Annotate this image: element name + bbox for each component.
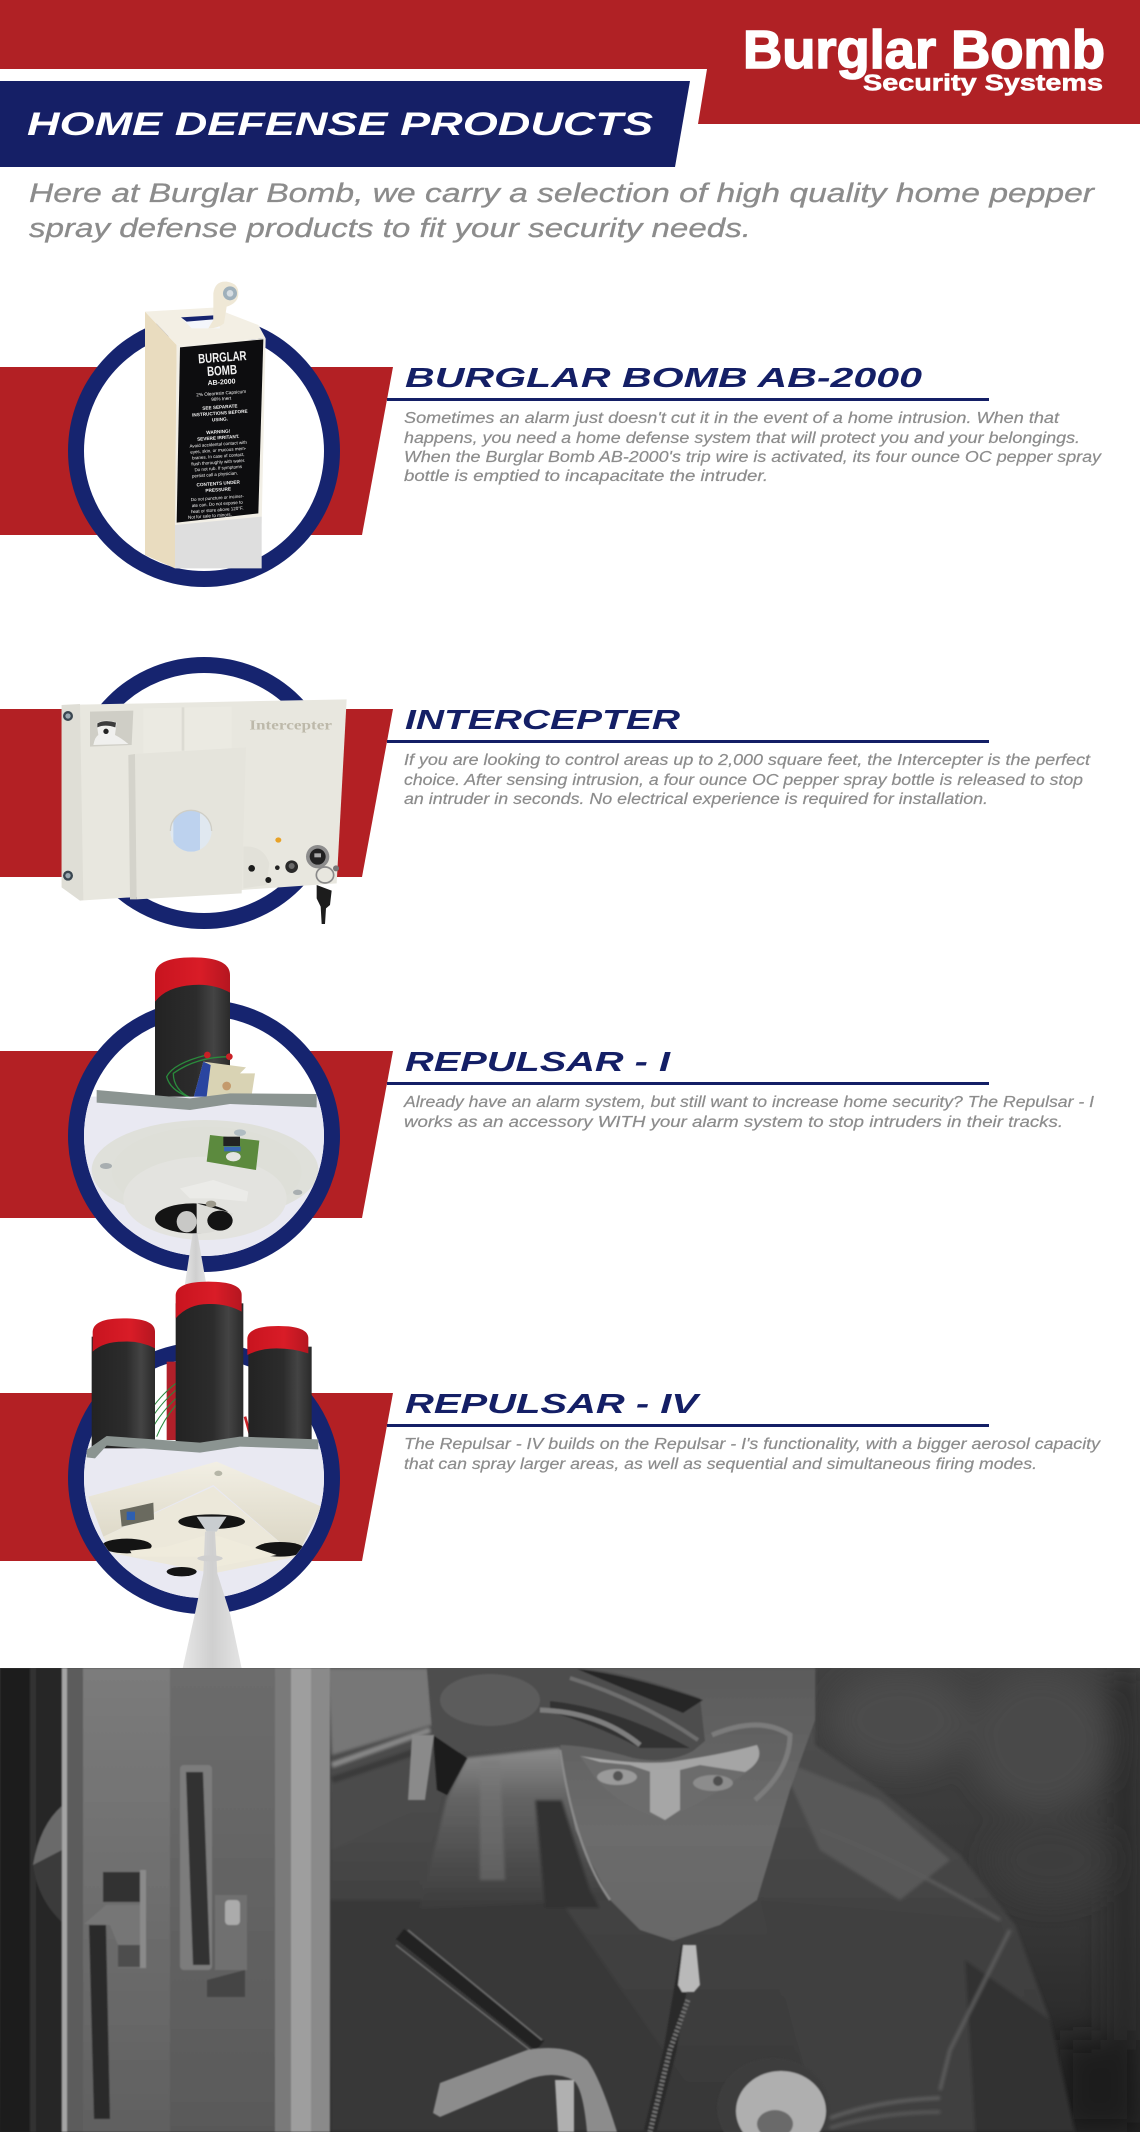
product image: Repulsar IV: [77, 1282, 333, 1668]
seams: [940, 1930, 1010, 2090]
product label text: BOMB: [207, 362, 238, 379]
description: Sometimes an alarm just doesn't cut it in the event of a home intrusion. When that: [404, 410, 1060, 427]
navy ring: [76, 1008, 332, 1264]
crowbar: [433, 2048, 617, 2132]
heading: REPULSAR - I: [405, 1046, 672, 1077]
panel: Repulsar - IV: [0, 1282, 1101, 1668]
description: that can spray larger areas, as well as sequential and simultaneous firing modes.: [404, 1456, 1037, 1473]
product label text: SEE SEPARATE: [202, 403, 238, 411]
heading rule: [387, 1082, 989, 1085]
collar folds: [436, 1746, 582, 1857]
product label text: WARNING!: [206, 428, 231, 435]
heading rule: [387, 398, 989, 401]
description: [404, 410, 1102, 485]
product image: Repulsar I: [77, 957, 333, 1290]
nose: [650, 1768, 680, 1820]
cylinders: [92, 1282, 312, 1448]
title bar: [0, 81, 690, 167]
key: [316, 867, 334, 924]
description: works as an accessory WITH your alarm system to stop intruders in their tracks.: [404, 1114, 1063, 1131]
header: [0, 0, 1140, 167]
product label text: BURGLAR: [198, 348, 247, 366]
product label text: AB-2000: [207, 378, 236, 387]
product label text: 98% Inert: [211, 396, 232, 402]
glove: [427, 1668, 705, 1760]
red band: [0, 709, 393, 877]
intro paragraph: Here at Burglar Bomb, we carry a selection of high quality home pepper: [29, 178, 1095, 208]
product image: AB-2000: [145, 282, 266, 568]
intro paragraph: [29, 178, 1095, 243]
product label text: SEVERE IRRITANT.: [197, 434, 240, 442]
description: an intruder in seconds. No electrical experience is required for installation.: [404, 791, 988, 808]
description: If you are looking to control areas up to 2,000 square feet, the Intercepter is the perfect: [404, 752, 1091, 769]
product label text: [188, 348, 248, 520]
product label text: INSTRUCTIONS BEFORE: [192, 409, 248, 418]
product image: Intercepter: [62, 699, 347, 924]
sleeve: [327, 1668, 432, 1755]
product label text: heat or store above 120°F.: [191, 506, 244, 514]
product label text: eyes, skin, or mucous mem-: [190, 446, 247, 455]
product label text: CONTENTS UNDER: [196, 479, 241, 488]
description: choice. After sensing intrusion, a four ounce OC pepper spray bottle is released to stop: [404, 772, 1083, 789]
eyes: [597, 1769, 637, 1785]
heading rule: [387, 1424, 989, 1427]
description: happens, you need a home defense system that will protect you and your belongings.: [404, 430, 1080, 447]
intro paragraph: spray defense products to fit your security needs.: [29, 213, 751, 243]
navy ring: [76, 323, 332, 579]
description: [404, 752, 1091, 808]
product label text: 2% Oleoresin Capsicum: [196, 389, 246, 397]
panel: Burglar Bomb AB-2000: [0, 282, 1102, 579]
jacket: [327, 1668, 1075, 2132]
logo: Security Systems: [863, 70, 1103, 96]
face opening: [583, 1758, 591, 1762]
heading: INTERCEPTER: [405, 704, 681, 735]
logo: Burglar Bomb: [743, 20, 1105, 80]
description: When the Burglar Bomb AB-2000's trip wire is activated, its four ounce OC pepper spray: [404, 449, 1102, 466]
description: The Repulsar - IV builds on the Repulsar - I's functionality, with a bigger aerosol capacity: [404, 1436, 1101, 1453]
cylinder: [155, 957, 230, 1098]
panel: Intercepter: [0, 665, 1091, 924]
lower zipper pull: [555, 2080, 574, 2132]
zipper pull on sleeve: [408, 1735, 434, 1800]
product label text: ate can. Do not expose to: [192, 500, 243, 508]
description: Already have an alarm system, but still want to increase home security? The Repulsar - I: [403, 1094, 1095, 1111]
red band: [0, 1393, 393, 1561]
red band: [0, 1051, 393, 1218]
foam ceiling strip: [87, 1436, 318, 1458]
navy ring: [76, 1350, 332, 1606]
spray cone: [183, 1532, 242, 1668]
product label text: Not for sale to minors.: [188, 512, 232, 520]
product label text: flush thoroughly with water.: [191, 458, 245, 467]
heading: BURGLAR BOMB AB-2000: [405, 362, 923, 393]
door handle right: [180, 1765, 212, 1970]
heading rule: [387, 740, 989, 743]
heading: REPULSAR - IV: [405, 1388, 701, 1419]
hood and mask: [560, 1668, 815, 1941]
product label text: Do not puncture or inciner-: [191, 493, 244, 502]
product label text: PRESSURE: [205, 486, 231, 493]
product label text: Do not rub. If symptoms: [194, 464, 243, 472]
product label text: Avoid accidental contact with: [189, 440, 248, 449]
photo: masked burglar at door: [0, 1668, 1140, 2132]
flashlight: [724, 2070, 827, 2132]
product label text: persist call a physician.: [192, 470, 238, 479]
product label text: USING.: [212, 416, 228, 423]
door frame: [0, 1668, 330, 2132]
jacket seam band: [400, 1934, 540, 2046]
description: [403, 1094, 1095, 1131]
embossed product name: Intercepter: [249, 718, 332, 733]
red header banner: [0, 0, 1140, 124]
main zipper: [650, 1945, 688, 2132]
door handle left: [140, 1870, 146, 1968]
panel: Repulsar - I: [0, 957, 1095, 1290]
title text: HOME DEFENSE PRODUCTS: [27, 106, 654, 142]
navy ring: [76, 665, 332, 921]
description: bottle is emptied to incapacitate the intruder.: [404, 468, 768, 485]
product label text: branes. In case of contact,: [192, 452, 245, 460]
red band: [0, 367, 393, 535]
spray cone: [184, 1233, 207, 1290]
description: [404, 1436, 1101, 1473]
